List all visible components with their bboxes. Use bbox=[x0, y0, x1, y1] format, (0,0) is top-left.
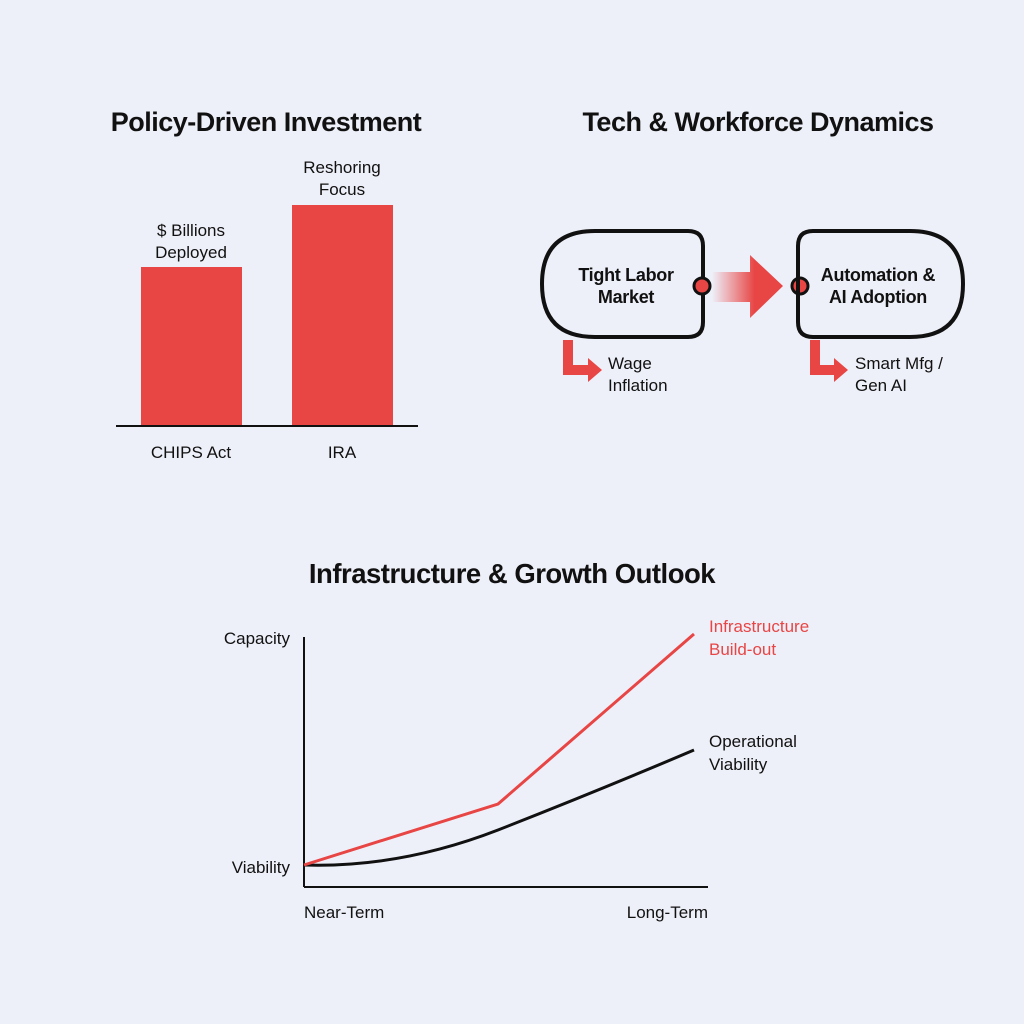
title: Policy-Driven Investment: Policy-Driven Investment bbox=[111, 107, 422, 137]
icon: arrow to Smart Mfg bbox=[815, 340, 836, 370]
box: Tight Labor Market: Tight Labor bbox=[578, 265, 674, 285]
bar: IRA bbox=[292, 205, 393, 426]
legend: Operational Viability: Viability bbox=[709, 755, 768, 774]
flow diagram bbox=[542, 231, 963, 395]
y label: Capacity: Capacity bbox=[224, 629, 290, 648]
bar label: $ Billions Deployed: $ Billions bbox=[157, 221, 225, 240]
line: Operational Viability bbox=[304, 750, 694, 865]
bar label: $ Billions Deployed: Deployed bbox=[155, 243, 227, 262]
bar label: Reshoring Focus: Reshoring bbox=[303, 158, 381, 177]
box: Tight Labor Market: Market bbox=[598, 287, 654, 307]
box: Automation & AI Adoption bbox=[798, 231, 963, 337]
text: Smart Mfg / Gen AI: Smart Mfg / bbox=[855, 354, 943, 373]
x label: Long-Term: Long-Term bbox=[627, 903, 708, 922]
legend: Operational Viability: Operational bbox=[709, 732, 797, 751]
y label: Viability: Viability bbox=[232, 858, 290, 877]
x label: IRA: IRA bbox=[328, 443, 357, 462]
x label: Near-Term: Near-Term bbox=[304, 903, 384, 922]
icon: arrow to Wage Inflation bbox=[568, 340, 590, 370]
line: Infrastructure Build-out bbox=[304, 634, 694, 865]
x label: CHIPS Act: CHIPS Act bbox=[151, 443, 231, 462]
connector dots bbox=[694, 278, 710, 294]
bar chart bbox=[116, 158, 418, 462]
legend: Infrastructure Build-out: Infrastructure bbox=[709, 617, 809, 636]
box: Tight Labor Market bbox=[542, 231, 703, 337]
title: Tech & Workforce Dynamics: Tech & Workforce Dynamics bbox=[582, 107, 934, 137]
box: Automation & AI Adoption: AI Adoption bbox=[829, 287, 927, 307]
text: Wage Inflation: Inflation bbox=[608, 376, 668, 395]
bar: CHIPS Act bbox=[141, 267, 242, 426]
text: Wage Inflation: Wage bbox=[608, 354, 652, 373]
bar label: Reshoring Focus: Focus bbox=[319, 180, 365, 199]
box: Automation & AI Adoption: Automation & bbox=[821, 265, 935, 285]
text: Smart Mfg / Gen AI: Gen AI bbox=[855, 376, 907, 395]
arrow: gradient bbox=[712, 255, 783, 318]
line chart bbox=[224, 617, 809, 922]
title: Infrastructure & Growth Outlook: Infrastructure & Growth Outlook bbox=[309, 558, 716, 589]
legend: Infrastructure Build-out: Build-out bbox=[709, 640, 776, 659]
